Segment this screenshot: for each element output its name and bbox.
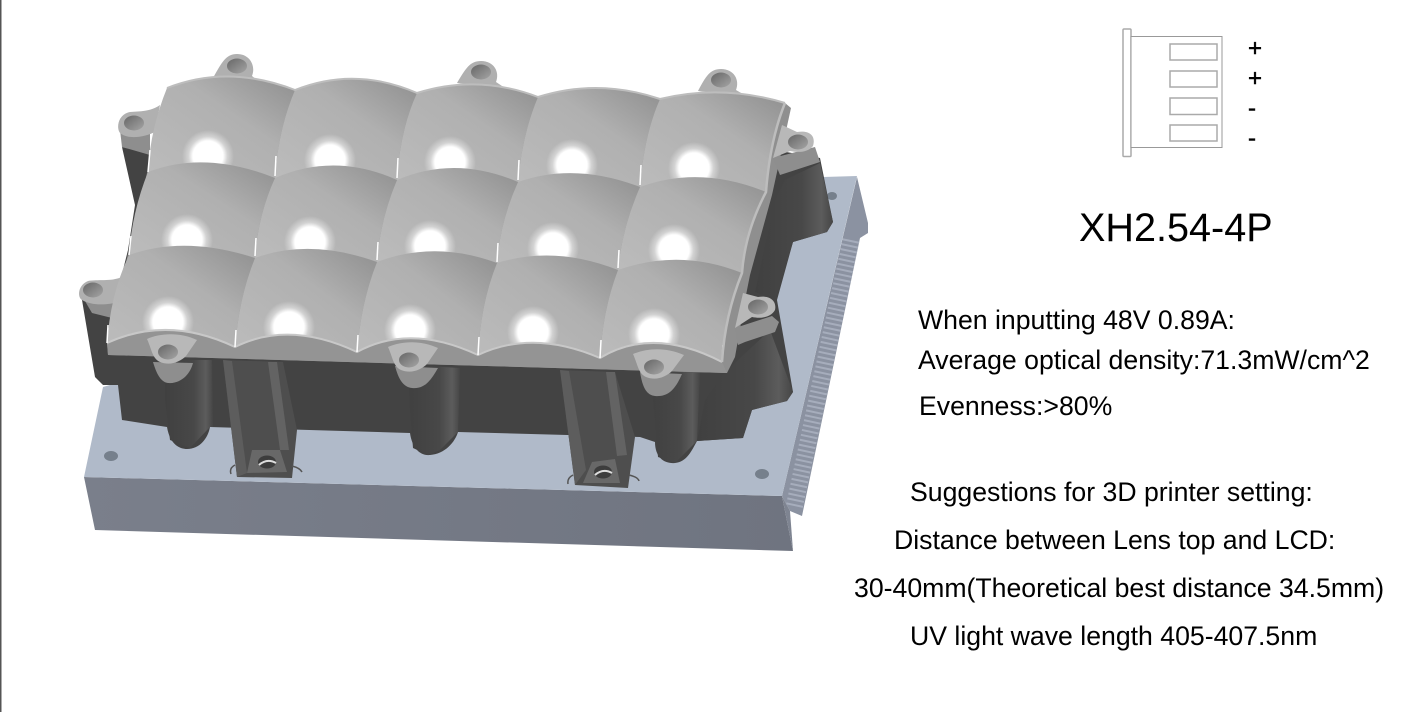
mounting bracket right (560, 370, 639, 488)
connector flange (1123, 29, 1131, 156)
printer setting suggestions: 30-40mm(Theoretical best distance 34.5mm) (854, 573, 1384, 603)
electrical and optical specs (918, 305, 1370, 421)
printer setting suggestions (854, 477, 1384, 651)
lens right edge lip (722, 103, 785, 362)
connector diagram (1123, 29, 1262, 156)
connector pin slots (1170, 44, 1217, 141)
lens row 1 (148, 76, 785, 192)
lug: left upper (118, 105, 160, 137)
lens front rim (107, 330, 727, 373)
lug: left lower (79, 277, 122, 304)
illustration: lens array on heatsink (79, 54, 868, 551)
lens rim underlay (107, 88, 791, 373)
lens top rim (167, 76, 785, 103)
mounting lugs with holes (79, 54, 814, 328)
pin polarity labels (1248, 35, 1262, 152)
printer setting suggestions: UV light wave length 405-407.5nm (910, 621, 1317, 651)
highlights row 1 (182, 130, 720, 194)
lug: back right (698, 69, 748, 97)
plate mounting holes (104, 192, 837, 479)
lug: front right (633, 349, 684, 379)
lug: right lower (735, 293, 775, 328)
pin polarity labels: - (1248, 95, 1256, 122)
lug: front left (147, 334, 197, 364)
mounting bracket left (223, 360, 302, 478)
printer setting suggestions: Distance between Lens top and LCD: (894, 525, 1335, 555)
heatsink fins (782, 177, 868, 516)
printer setting suggestions: Suggestions for 3D printer setting: (910, 477, 1313, 507)
lug: front centre (388, 342, 438, 372)
lens row 2 (129, 162, 766, 273)
electrical and optical specs: Average optical density:71.3mW/cm^2 (918, 345, 1370, 375)
pin polarity labels: - (1248, 125, 1256, 152)
connector body (1131, 36, 1222, 148)
heatsink top plate (84, 176, 857, 496)
lens seam glints (107, 150, 723, 362)
electrical and optical specs: When inputting 48V 0.89A: (918, 305, 1235, 335)
pin polarity labels: + (1248, 35, 1262, 62)
highlights row 3 (142, 296, 680, 360)
highlights row 2 (161, 214, 700, 276)
heatsink front face (84, 477, 793, 551)
lug: back centre (457, 61, 508, 90)
electrical and optical specs: Evenness:>80% (919, 391, 1112, 421)
lens row 3 (107, 246, 742, 364)
dark lens housing body (82, 110, 833, 463)
collars under lugs (82, 125, 820, 396)
lens array (107, 76, 785, 379)
lug: right upper (773, 125, 814, 158)
lug: back left (213, 54, 262, 84)
front lugs (147, 334, 684, 379)
pin polarity labels: + (1248, 65, 1262, 92)
connector model heading: XH2.54-4P (1079, 206, 1273, 250)
